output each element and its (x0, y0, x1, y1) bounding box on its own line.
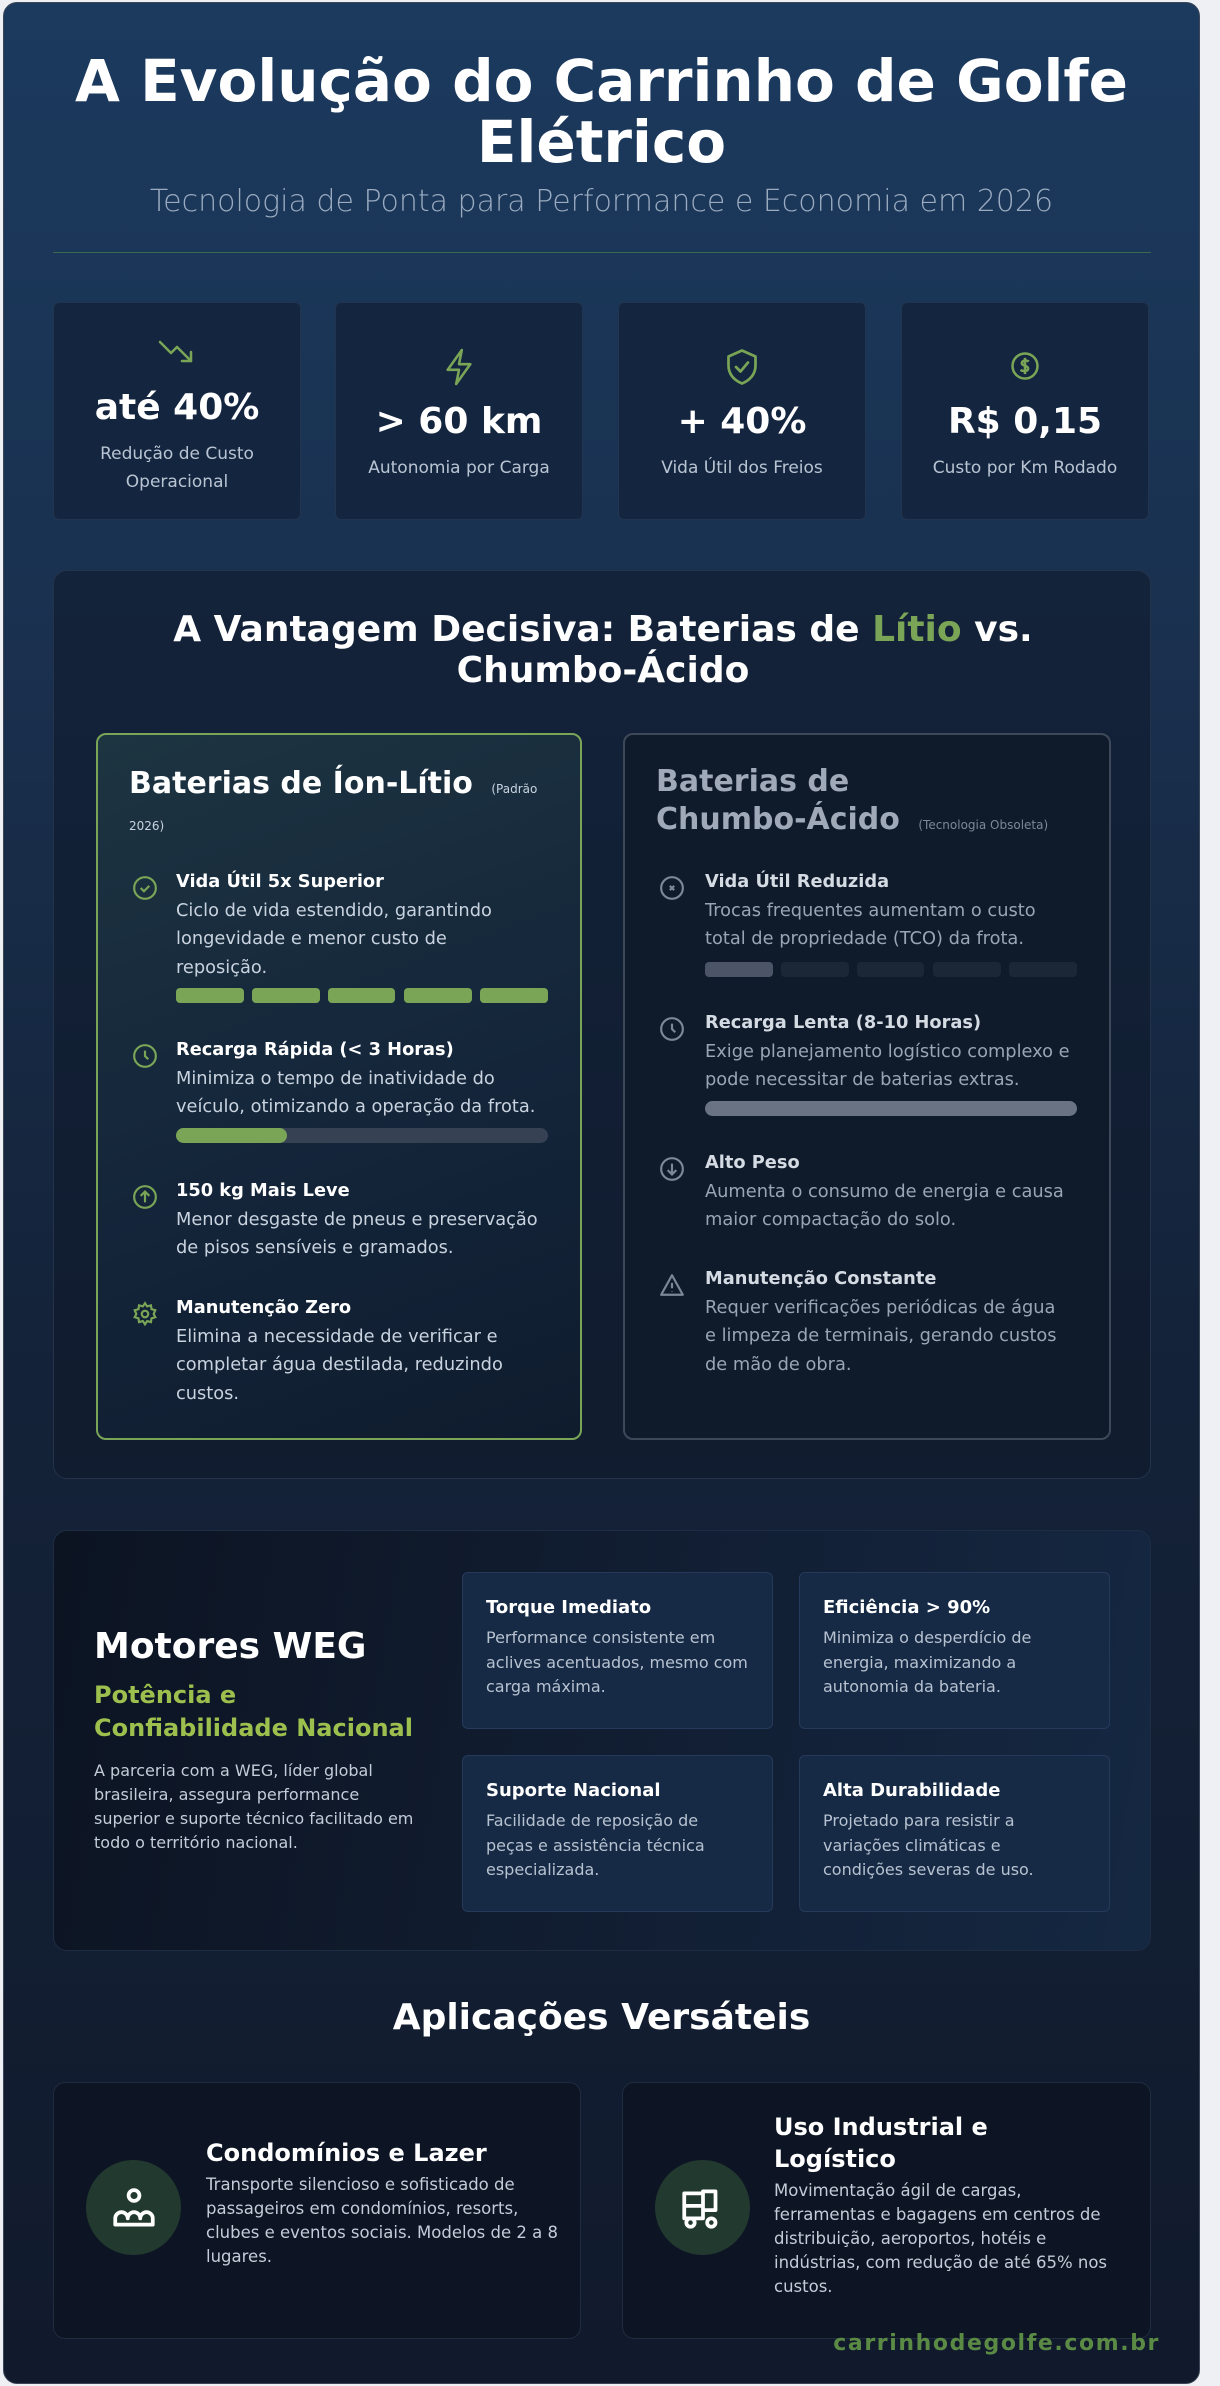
lead acid title: Chumbo-Ácido (Tecnologia Obsoleta) (656, 802, 1048, 837)
weg heading: Motores WEG (94, 1626, 366, 1667)
stat card: freios (618, 302, 866, 520)
card: lithium (96, 733, 582, 1440)
lithium title: Baterias de Íon-Lítio (Padrão 2026) (129, 766, 537, 833)
stat card: custo por km: Custo por Km Rodado (933, 458, 1117, 478)
icon: clock (133, 1044, 157, 1068)
app card: condominios (53, 2082, 581, 2339)
title: Elétrico (477, 108, 726, 176)
item: manutencao constante: Manutenção Constante (705, 1268, 936, 1289)
weg subtitle: Potência e (94, 1681, 236, 1709)
weg subtitle (94, 1681, 413, 1742)
feature: suporte (462, 1755, 773, 1912)
lead acid title (656, 764, 1048, 837)
item: alto peso (705, 1152, 1064, 1230)
heading: comparison (173, 609, 1033, 691)
icon: coin (1011, 352, 1039, 380)
heading: comparison: A Vantagem Decisiva: Baterias de Lítio vs. (173, 609, 1033, 650)
icon: shield check (727, 349, 757, 385)
item: peso: 150 kg Mais Leve (176, 1180, 350, 1201)
condominios text: Transporte silencioso e sofisticado de (206, 2175, 515, 2194)
feature: durabilidade: Projetado para resistir a (823, 1811, 1015, 1830)
item: manutencao constante: e limpeza de terminais, gerando custos de mão de obra. (705, 1325, 1057, 1374)
icon: clock grey (660, 1017, 684, 1041)
stat card: custo operacional: Operacional (126, 472, 228, 492)
subtitle: Tecnologia de Ponta para Performance e Economia em 2026 (150, 184, 1053, 219)
icon: warning (660, 1274, 684, 1296)
title (75, 47, 1128, 176)
item: alto peso: Aumenta o consumo de energia e causa maior compactação do solo. (705, 1180, 1064, 1230)
item: vida reduzida: Trocas frequentes aumentam o custo total de propriedade (TCO) da frota. (705, 900, 1036, 949)
icon: arrow down circle (660, 1157, 684, 1181)
icon: gear (133, 1301, 157, 1326)
condominios text: clubes e eventos sociais. Modelos de 2 a 8 (206, 2223, 558, 2242)
stat card: custo operacional: Redução de Custo (100, 444, 254, 464)
icon: people (86, 2160, 181, 2255)
industrial text: Uso Industrial e (774, 2113, 988, 2141)
stat card: freios: + 40% (678, 401, 806, 442)
item: vida util: Ciclo de vida estendido, garantindo longevidade e menor custo de reposição. (176, 900, 492, 978)
footer url: carrinhodegolfe.com.br (833, 2331, 1160, 2356)
item: recarga: Minimiza o tempo de inatividade do veículo, otimizando a operação da frota. (176, 1068, 535, 1117)
weg subtitle: Confiabilidade Nacional (94, 1714, 413, 1742)
feature: suporte: Suporte Nacional (486, 1780, 661, 1801)
heading: comparison: Chumbo-Ácido (457, 650, 749, 691)
lead acid title: Baterias de (656, 764, 849, 799)
item: recarga lenta: Recarga Lenta (8-10 Horas) (705, 1012, 981, 1033)
feature: durabilidade: condições severas de uso. (823, 1860, 1034, 1879)
bar: segments grey (705, 962, 1077, 977)
stat card: custo operacional (53, 302, 301, 520)
item: manutencao: Elimina a necessidade de verificar e completar água destilada, reduzindo custos. (176, 1326, 503, 1404)
condominios text: lugares. (206, 2247, 272, 2266)
icon: x circle (660, 876, 684, 900)
condominios text (206, 2139, 558, 2266)
icon: lightning (446, 348, 472, 386)
icon: check circle (133, 876, 157, 900)
item: recarga lenta: Exige planejamento logístico complexo e pode necessitar de baterias extras. (705, 1040, 1070, 1090)
icon: arrow up circle (133, 1185, 157, 1209)
bar: recharge (176, 1128, 548, 1143)
stat card: autonomia: Autonomia por Carga (368, 458, 550, 478)
feature: torque: Torque Imediato (486, 1597, 651, 1618)
item: vida reduzida (704, 870, 1036, 949)
panel: motores WEG (53, 1530, 1151, 1951)
item: recarga lenta (705, 1012, 1070, 1090)
stat card: autonomia (335, 302, 583, 520)
bar: full grey (705, 1101, 1077, 1116)
icon: truck (655, 2160, 750, 2255)
industrial text (774, 2113, 1107, 2296)
title: A Evolução do Carrinho de Golfe (75, 47, 1128, 115)
feature: durabilidade (799, 1755, 1110, 1912)
feature: eficiencia: Eficiência > 90% (823, 1597, 990, 1618)
feature: durabilidade: variações climáticas e (823, 1836, 1001, 1854)
condominios text: Condomínios e Lazer (206, 2139, 487, 2167)
app card: industrial (622, 2082, 1151, 2339)
item: vida reduzida: Vida Útil Reduzida (705, 871, 889, 892)
item: vida util: Vida Útil 5x Superior (176, 871, 384, 892)
feature: torque: Performance consistente em aclives acentuados, mesmo com carga máxima. (486, 1628, 748, 1696)
stat card: custo por km: R$ 0,15 (948, 401, 1102, 442)
feature: eficiencia: Minimiza o desperdício de energia, maximizando a autonomia da bateria. (823, 1628, 1031, 1696)
feature: suporte: Facilidade de reposição de (486, 1811, 698, 1830)
item: recarga: Recarga Rápida (< 3 Horas) (176, 1039, 454, 1060)
item: alto peso: Alto Peso (705, 1152, 800, 1173)
industrial text: Logístico (774, 2145, 896, 2173)
item: manutencao constante (705, 1268, 1057, 1374)
heading: aplicacoes: Aplicações Versáteis (393, 1997, 810, 2038)
bar: segments (176, 988, 548, 1003)
industrial text: Movimentação ágil de cargas, ferramentas e bagagens em centros de distribuição, aeroportos, hotéis e indústrias, com redução de até 65% nos custos. (774, 2181, 1107, 2296)
item: recarga (176, 1039, 535, 1117)
card: lead acid (623, 733, 1111, 1440)
stat card: freios: Vida Útil dos Freios (661, 458, 823, 478)
panel: comparison (53, 570, 1151, 1479)
stat card: custo operacional: até 40% (95, 387, 259, 428)
stat card: custo por km (901, 302, 1149, 520)
condominios text: passageiros em condomínios, resorts, (206, 2199, 518, 2218)
item: peso: Menor desgaste de pneus e preservação de pisos sensíveis e gramados. (176, 1208, 538, 1258)
weg description: A parceria com a WEG, líder global brasileira, assegura performance superior e suporte técnico facilitado em todo o território nacional. (94, 1761, 413, 1852)
feature: torque (462, 1572, 773, 1729)
feature: eficiencia (799, 1572, 1110, 1729)
icon: trending down (158, 340, 192, 362)
item: manutencao: Manutenção Zero (176, 1297, 351, 1318)
item: manutencao constante: Requer verificações periódicas de água (705, 1296, 1055, 1318)
item: peso (176, 1180, 538, 1258)
stat card: autonomia: > 60 km (376, 401, 542, 442)
feature: suporte: peças e assistência técnica especializada. (486, 1836, 705, 1879)
feature: durabilidade: Alta Durabilidade (823, 1780, 1000, 1801)
